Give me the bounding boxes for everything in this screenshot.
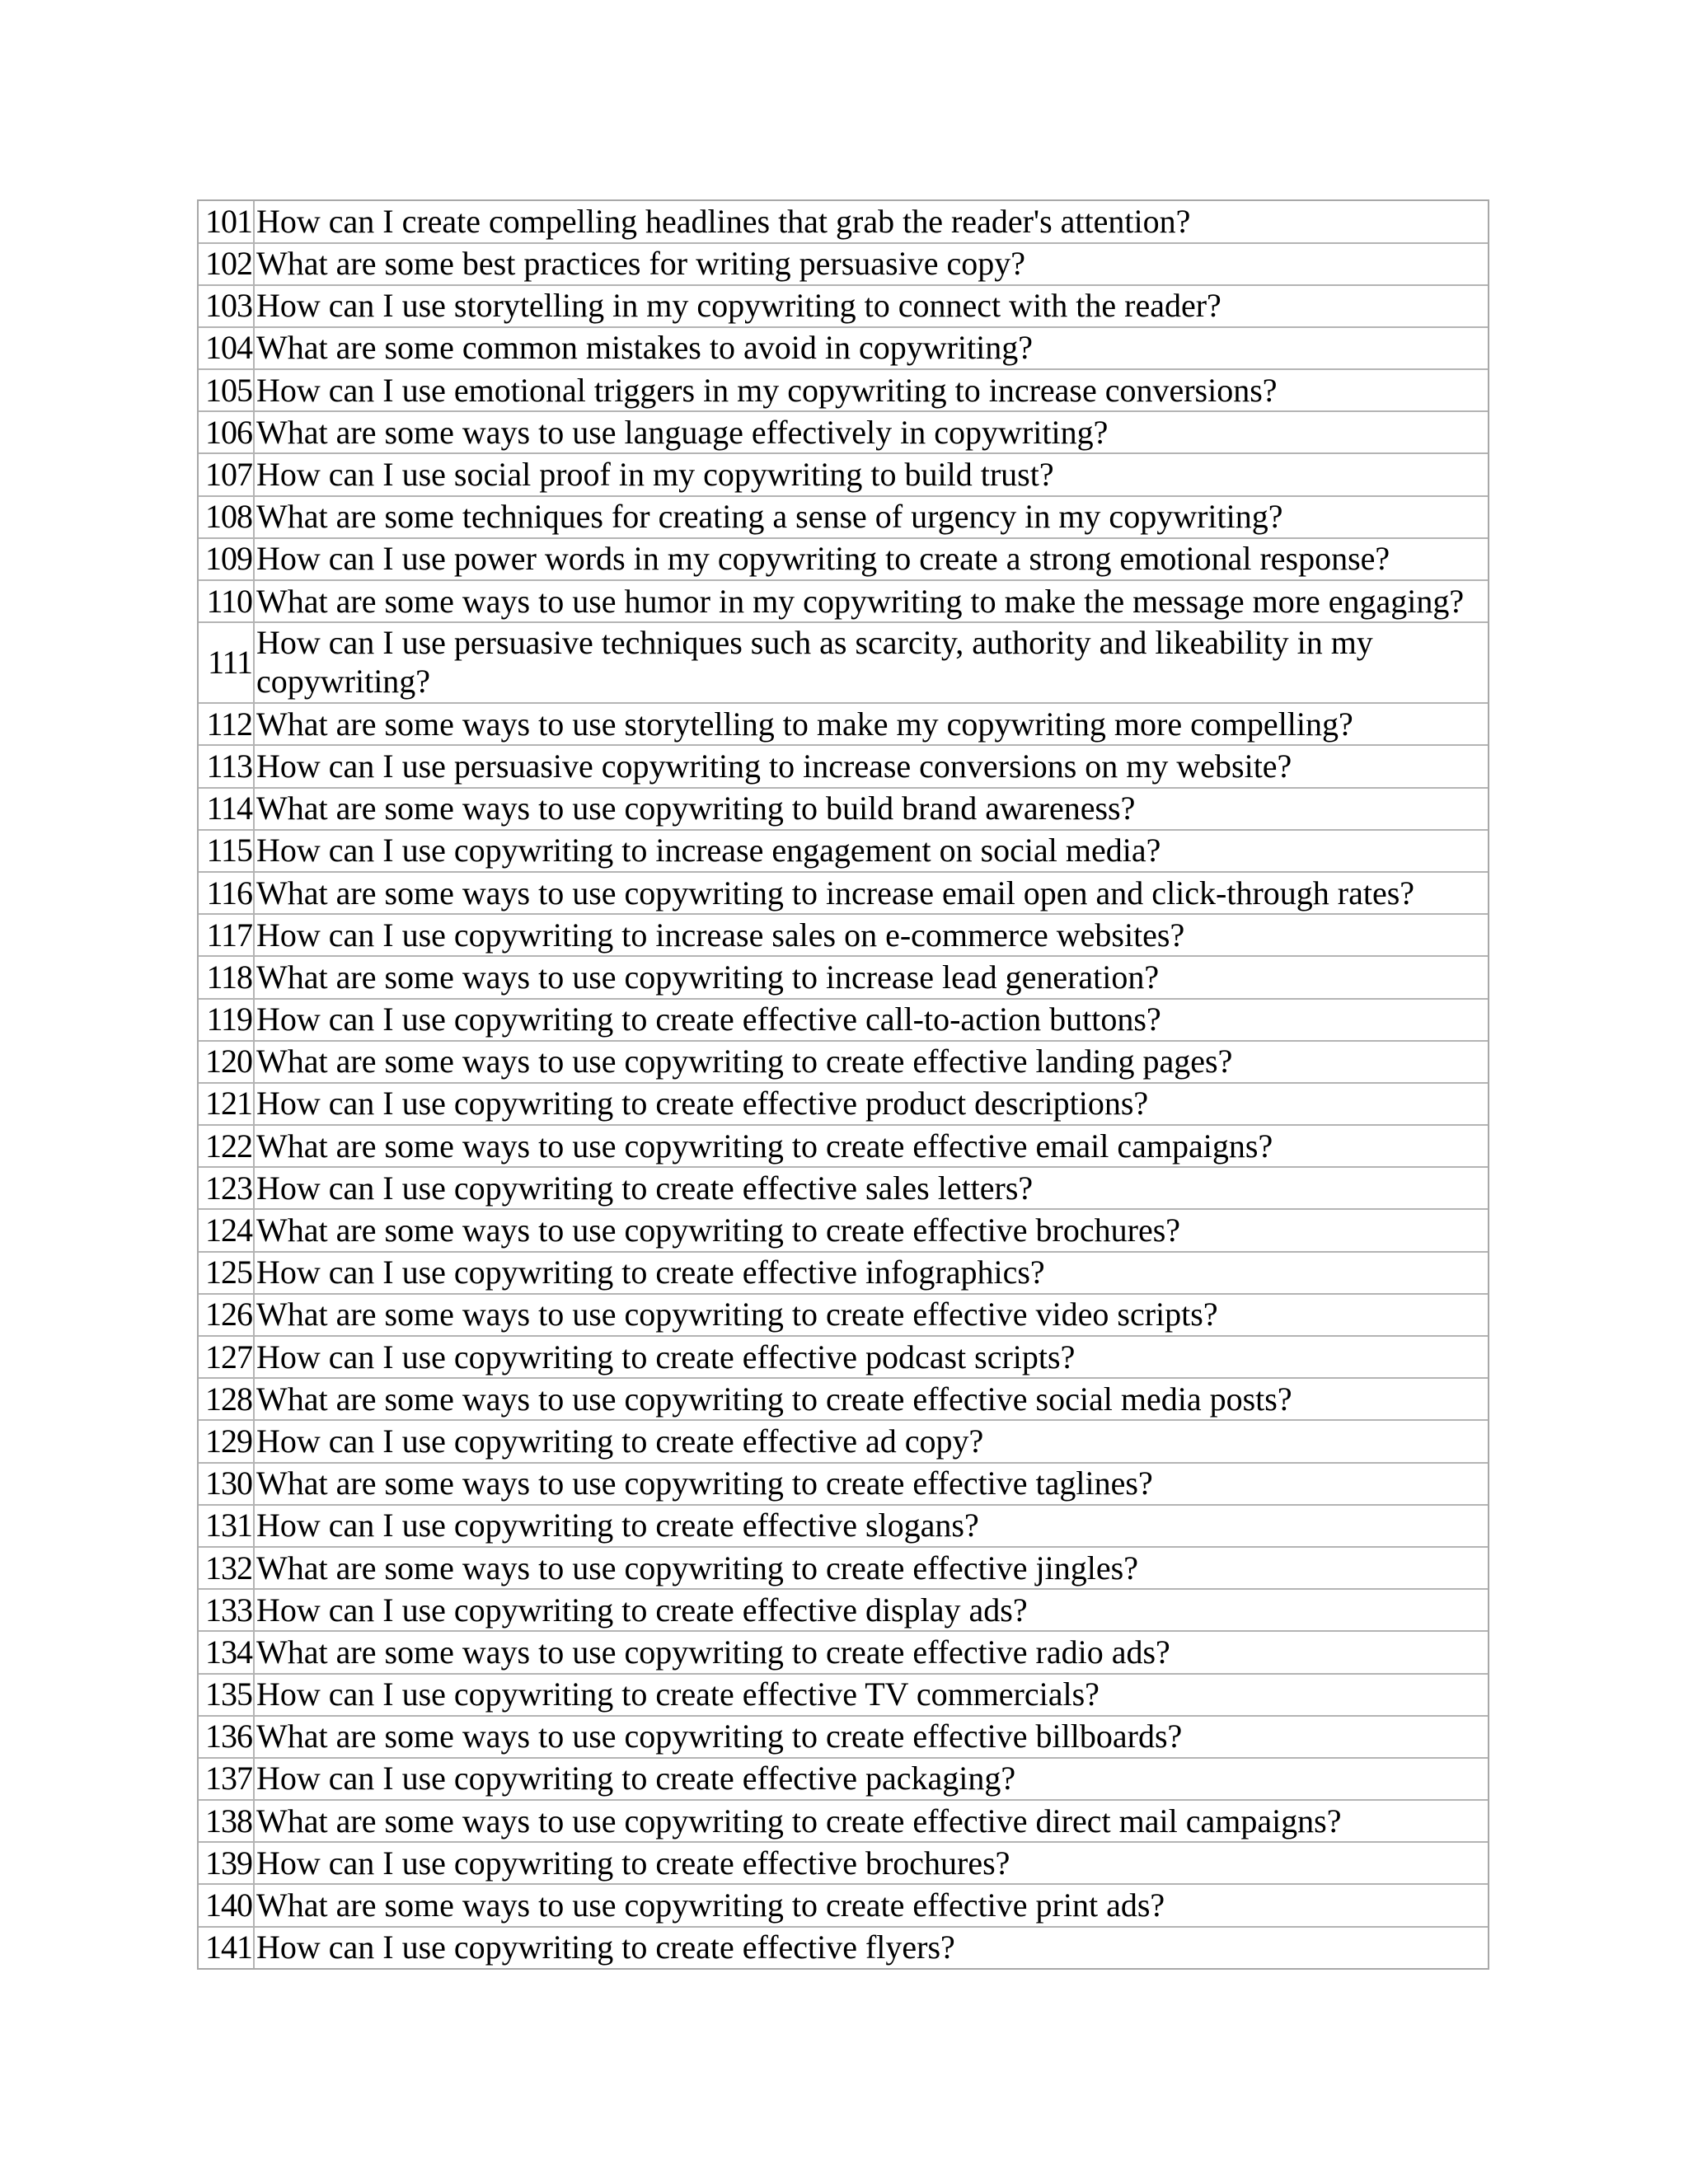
table: copywriting questions 101-141: What are some ways to use copywriting to create effective social media posts? <box>256 1380 1292 1418</box>
table: copywriting questions 101-141: 115 <box>206 832 252 869</box>
table: copywriting questions 101-141: 138 <box>205 1802 252 1840</box>
table: copywriting questions 101-141: What are some ways to use copywriting to create effective jingles? <box>256 1549 1138 1586</box>
table: copywriting questions 101-141: 124 <box>205 1212 252 1249</box>
table: copywriting questions 101-141: 103 <box>205 287 252 324</box>
table: copywriting questions 101-141: 105 <box>205 372 252 409</box>
table: copywriting questions 101-141: How can I use copywriting to create effective slogans? <box>256 1507 979 1544</box>
table: copywriting questions 101-141: What are some ways to use copywriting to create effective landing pages? <box>256 1043 1232 1080</box>
table: copywriting questions 101-141: 126 <box>205 1296 252 1333</box>
table: copywriting questions 101-141: What are some ways to use humor in my copywriting to make the message more engaging? <box>256 583 1464 620</box>
table: copywriting questions 101-141: How can I use copywriting to create effective packaging? <box>256 1760 1015 1797</box>
table: copywriting questions 101-141: How can I use copywriting to create effective product descriptions? <box>256 1085 1148 1122</box>
table: copywriting questions 101-141: How can I use social proof in my copywriting to build trust? <box>256 456 1054 493</box>
table: copywriting questions 101-141: 129 <box>205 1422 252 1460</box>
table: copywriting questions 101-141: What are some ways to use copywriting to create effective radio ads? <box>256 1633 1170 1671</box>
table: copywriting questions 101-141: 140 <box>205 1886 252 1924</box>
table: copywriting questions 101-141: 132 <box>205 1549 252 1586</box>
table: copywriting questions 101-141: What are some ways to use language effectively in copywriting? <box>256 414 1108 451</box>
table: copywriting questions 101-141: What are some best practices for writing persuasive copy? <box>256 245 1025 282</box>
table: copywriting questions 101-141: 101 <box>205 203 252 240</box>
table: copywriting questions 101-141: 131 <box>205 1507 252 1544</box>
table: copywriting questions 101-141: How can I use copywriting to create effective flyers? <box>256 1929 955 1966</box>
table: copywriting questions 101-141: 130 <box>205 1465 252 1502</box>
table: copywriting questions 101-141: How can I use copywriting to increase engagement on social media? <box>256 832 1160 869</box>
table: copywriting questions 101-141: 141 <box>205 1929 252 1966</box>
table: copywriting questions 101-141: What are some ways to use copywriting to create effective brochures? <box>256 1212 1180 1249</box>
table: copywriting questions 101-141: How can I use storytelling in my copywriting to connect with the reader? <box>256 287 1221 324</box>
table: copywriting questions 101-141: 118 <box>206 958 252 996</box>
table: copywriting questions 101-141: What are some ways to use copywriting to create effective print ads? <box>256 1886 1165 1924</box>
table: copywriting questions 101-141: How can I create compelling headlines that grab the reader's attention? <box>256 203 1190 240</box>
table: copywriting questions 101-141: 127 <box>205 1338 252 1376</box>
table: copywriting questions 101-141: 112 <box>206 705 252 743</box>
table: copywriting questions 101-141: 134 <box>205 1633 252 1671</box>
table: copywriting questions 101-141: 104 <box>205 329 252 366</box>
table: copywriting questions 101-141: 136 <box>205 1718 252 1755</box>
table: copywriting questions 101-141: 117 <box>206 916 252 954</box>
table: copywriting questions 101-141: 108 <box>205 498 252 535</box>
table: copywriting questions 101-141: 125 <box>205 1254 252 1291</box>
table: copywriting questions 101-141: How can I use persuasive copywriting to increase conversions on my website? <box>256 748 1292 785</box>
table: copywriting questions 101-141: How can I use copywriting to create effective brochures? <box>256 1844 1010 1882</box>
table: copywriting questions 101-141: 128 <box>205 1380 252 1418</box>
table: copywriting questions 101-141: 107 <box>205 456 252 493</box>
table: copywriting questions 101-141: How can I use power words in my copywriting to create a strong emotional response? <box>256 540 1390 577</box>
table: copywriting questions 101-141: How can I use copywriting to create effective podcast scripts? <box>256 1338 1075 1376</box>
table: copywriting questions 101-141: 111 <box>208 644 252 681</box>
table: copywriting questions 101-141: 102 <box>205 245 252 282</box>
table: copywriting questions 101-141: 121 <box>205 1085 252 1122</box>
table: copywriting questions 101-141: How can I use copywriting to create effective ad copy? <box>256 1422 983 1460</box>
table: copywriting questions 101-141: copywriting? <box>256 663 430 700</box>
table: copywriting questions 101-141: 135 <box>205 1675 252 1713</box>
table: copywriting questions 101-141: 122 <box>205 1127 252 1165</box>
table: copywriting questions 101-141: 120 <box>205 1043 252 1080</box>
table: copywriting questions 101-141: 133 <box>205 1591 252 1629</box>
table: copywriting questions 101-141: What are some ways to use copywriting to create effective email campaigns? <box>256 1127 1273 1165</box>
table: copywriting questions 101-141: What are some techniques for creating a sense of urgency in my copywriting? <box>256 498 1282 535</box>
table: copywriting questions 101-141: 109 <box>205 540 252 577</box>
table: copywriting questions 101-141: What are some ways to use copywriting to increase email open and click-through rates? <box>256 874 1414 912</box>
table: copywriting questions 101-141: How can I use copywriting to create effective call-to-action buttons? <box>256 1001 1161 1038</box>
table: copywriting questions 101-141: How can I use copywriting to create effective sales letters? <box>256 1169 1033 1207</box>
table: copywriting questions 101-141: How can I use copywriting to increase sales on e-commerce websites? <box>256 916 1184 954</box>
table: copywriting questions 101-141: What are some ways to use copywriting to build brand awareness? <box>256 790 1135 827</box>
table: copywriting questions 101-141: 114 <box>206 790 252 827</box>
table: copywriting questions 101-141: What are some ways to use copywriting to create effective video scripts? <box>256 1296 1218 1333</box>
table: copywriting questions 101-141: 113 <box>206 748 252 785</box>
table: copywriting questions 101-141: What are some ways to use copywriting to create effective billboards? <box>256 1718 1182 1755</box>
table: copywriting questions 101-141: 139 <box>205 1844 252 1882</box>
table: copywriting questions 101-141: What are some ways to use storytelling to make my copywriting more compelling? <box>256 705 1353 743</box>
table: copywriting questions 101-141: 116 <box>206 874 252 912</box>
table: copywriting questions 101-141: 119 <box>206 1001 252 1038</box>
table: copywriting questions 101-141: What are some ways to use copywriting to increase lead generation? <box>256 958 1159 996</box>
table: copywriting questions 101-141: What are some ways to use copywriting to create effective direct mail campaigns? <box>256 1802 1342 1840</box>
table: copywriting questions 101-141: 123 <box>205 1169 252 1207</box>
table: copywriting questions 101-141 <box>197 199 1489 1970</box>
table: copywriting questions 101-141: How can I use copywriting to create effective TV commercials? <box>256 1675 1100 1713</box>
table: copywriting questions 101-141: How can I use persuasive techniques such as scarcity, authority and likeability in my <box>256 624 1373 661</box>
table: copywriting questions 101-141: How can I use copywriting to create effective infographics? <box>256 1254 1045 1291</box>
table: copywriting questions 101-141: 110 <box>206 583 252 620</box>
table: copywriting questions 101-141: How can I use copywriting to create effective display ads? <box>256 1591 1028 1629</box>
table: copywriting questions 101-141: 137 <box>205 1760 252 1797</box>
table: copywriting questions 101-141: 106 <box>205 414 252 451</box>
table: copywriting questions 101-141: What are some ways to use copywriting to create effective taglines? <box>256 1465 1153 1502</box>
table: copywriting questions 101-141: What are some common mistakes to avoid in copywriting? <box>256 329 1033 366</box>
table: copywriting questions 101-141: How can I use emotional triggers in my copywriting to increase conversions? <box>256 372 1278 409</box>
